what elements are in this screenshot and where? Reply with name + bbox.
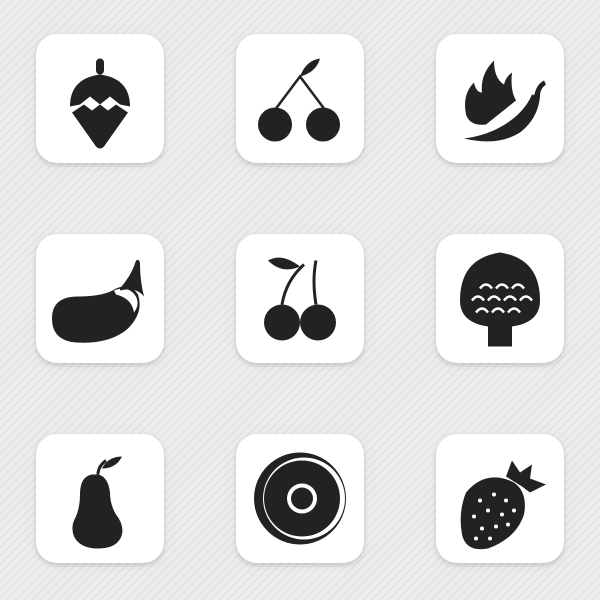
tile: cherries top <box>236 34 364 163</box>
icon: chili flame <box>464 60 546 141</box>
icon: strawberry <box>461 460 546 549</box>
tile: artichoke <box>436 234 564 363</box>
tile: eggplant <box>36 234 164 363</box>
icon: cherries with leaf <box>264 258 336 340</box>
tile: cherries middle <box>236 234 364 363</box>
icon: pear <box>72 456 122 548</box>
icon: eggplant <box>52 260 144 343</box>
tile: strawberry <box>436 434 564 563</box>
icon: cherries <box>258 58 340 142</box>
icon: hop <box>70 58 130 148</box>
tile: hop/artichoke bud <box>36 34 164 163</box>
icon: artichoke <box>460 252 540 346</box>
tile: melon slice <box>236 434 364 563</box>
tile: chili <box>436 34 564 163</box>
icon: melon <box>254 452 346 544</box>
tile: pear <box>36 434 164 563</box>
